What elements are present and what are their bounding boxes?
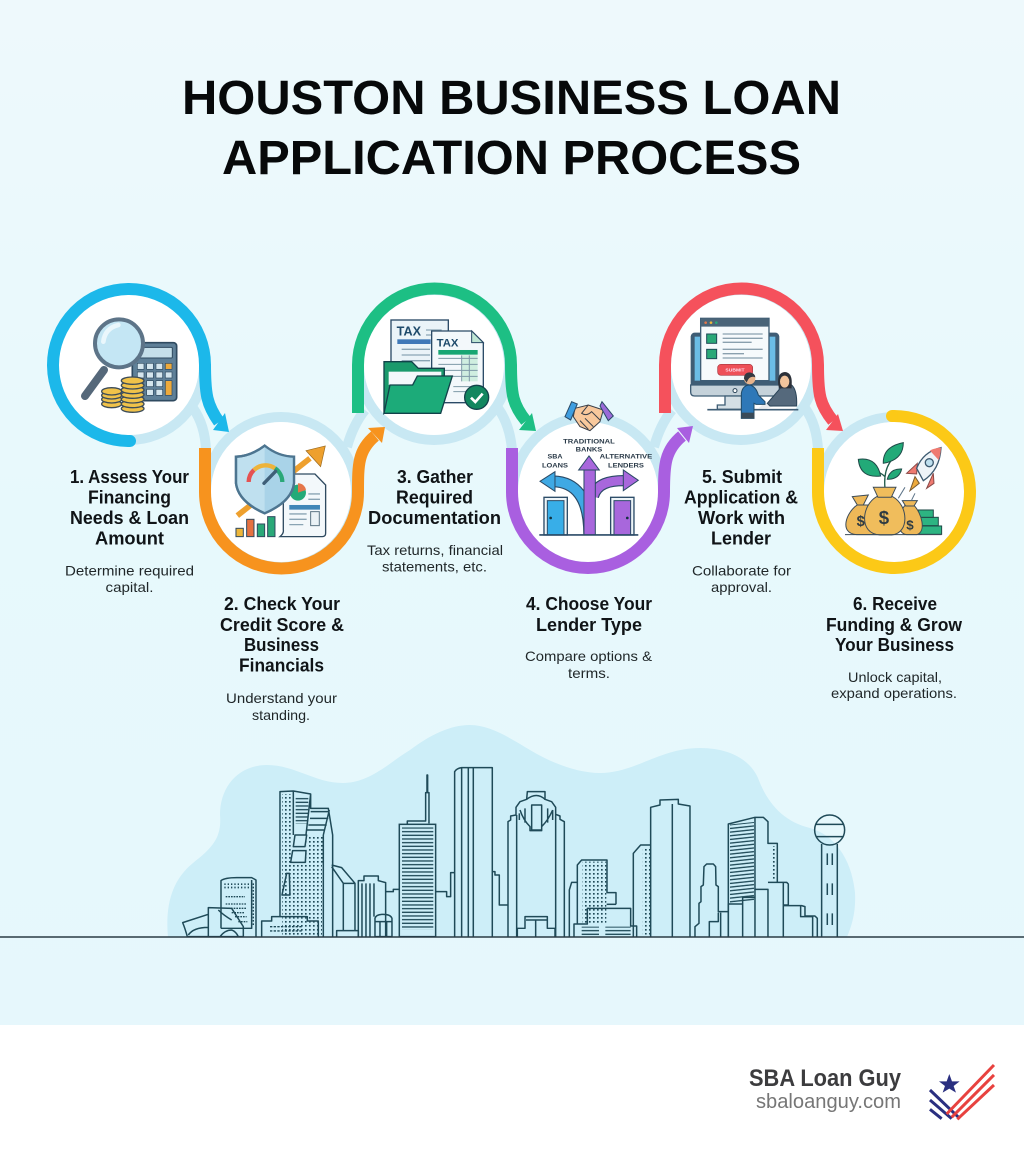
- description: step 4: Compare options &: [525, 648, 653, 664]
- title: HOUSTON BUSINESS LOAN: [182, 72, 841, 125]
- description: step 6: Unlock capital,: [848, 669, 942, 685]
- icon: handshake and diverging arrows: SBA: [547, 454, 563, 461]
- icon: money bags, plant and rocket: $: [906, 517, 914, 532]
- icon: tax documents and folder: [384, 320, 489, 413]
- title: [182, 72, 841, 185]
- description: step 4: [525, 648, 653, 681]
- heading: step 1: Financing: [88, 488, 171, 508]
- heading: step 2: Credit Score &: [220, 615, 344, 635]
- Houston skyline: left section: [183, 768, 508, 937]
- heading: step 4: 4. Choose Your: [526, 594, 652, 614]
- heading: step 2: 2. Check Your: [224, 594, 340, 614]
- description: step 1: capital.: [106, 579, 154, 595]
- icon: handshake and diverging arrows: ALTERNATIVE: [600, 454, 653, 461]
- description: step 3: [367, 542, 503, 574]
- title: APPLICATION PROCESS: [222, 132, 801, 185]
- step 4: choose lender type: [512, 402, 693, 681]
- icon: handshake and diverging arrows: BANKS: [576, 446, 603, 453]
- heading: step 2: Business: [244, 635, 319, 655]
- step 5: submit application: [665, 288, 843, 595]
- orange ring arrow: [205, 427, 385, 568]
- blue ring arrow: [53, 289, 229, 441]
- heading: step 1: [70, 467, 189, 548]
- heading: step 2: [220, 594, 344, 676]
- description: step 2: [226, 690, 337, 723]
- icon: magnifier, calculator and coins: [85, 319, 177, 412]
- step 1: assess financing needs: [53, 289, 229, 595]
- heading: step 1: Needs & Loan: [70, 508, 189, 528]
- description: step 5: approval.: [711, 579, 772, 595]
- heading: step 2: Financials: [239, 656, 324, 676]
- step 3: gather documentation: [358, 288, 536, 574]
- heading: step 4: [526, 594, 652, 635]
- description: step 5: [692, 562, 791, 595]
- heading: step 6: 6. Receive: [853, 594, 937, 614]
- heading: step 5: 5. Submit: [702, 467, 782, 487]
- footer brand text: [749, 1065, 902, 1113]
- icon: handshake and diverging arrows: LENDERS: [608, 462, 645, 469]
- description: step 3: statements, etc.: [382, 558, 487, 574]
- icon: money bags, plant and rocket: [845, 443, 942, 535]
- icon: computer form and handshake: [691, 318, 798, 418]
- footer brand text: SBA Loan Guy: [749, 1065, 902, 1092]
- yellow ring: [818, 416, 970, 568]
- ground line: [0, 936, 1024, 938]
- heading: step 3: [368, 467, 501, 528]
- icon: handshake and diverging arrows: TRADITIONAL: [563, 438, 615, 445]
- heading: step 3: Documentation: [368, 508, 501, 528]
- heading: step 5: Application &: [684, 488, 798, 508]
- heading: step 1: 1. Assess Your: [70, 467, 189, 487]
- step 2: check credit score: [205, 427, 385, 723]
- heading: step 4: Lender Type: [536, 615, 642, 635]
- heading: step 6: Your Business: [835, 635, 954, 655]
- description: step 5: Collaborate for: [692, 562, 791, 578]
- description: step 1: [65, 562, 194, 595]
- skyline backdrop blob: [167, 725, 855, 937]
- heading: step 5: [684, 467, 798, 548]
- green ring arrow: [358, 288, 536, 431]
- description: step 6: [831, 669, 957, 701]
- description: step 4: terms.: [568, 665, 610, 681]
- purple ring arrow: [512, 426, 693, 568]
- footer band: [0, 1025, 1024, 1154]
- icon: money bags, plant and rocket: $: [857, 514, 865, 530]
- heading: step 3: Required: [396, 488, 473, 508]
- description: step 6: expand operations.: [831, 685, 957, 701]
- icon: tax documents and folder: TAX: [397, 324, 422, 338]
- red ring arrow: [665, 288, 843, 431]
- icon: handshake and diverging arrows: LOANS: [542, 462, 569, 469]
- description: step 3: Tax returns, financial: [367, 542, 503, 558]
- heading: step 6: [826, 594, 963, 655]
- icon: handshake and diverging arrows: [539, 402, 653, 535]
- logo: star and stripes check: [930, 1065, 994, 1119]
- description: step 2: standing.: [252, 707, 310, 723]
- heading: step 5: Work with: [698, 508, 785, 528]
- icon: computer form and handshake: SUBMIT: [725, 368, 745, 374]
- icon: shield gauge, chart and report: [236, 446, 326, 537]
- heading: step 1: Amount: [95, 528, 164, 548]
- footer brand text: sbaloanguy.com: [756, 1091, 901, 1113]
- yellow ring rounded start: [886, 410, 898, 422]
- icon: tax documents and folder: TAX: [437, 338, 459, 350]
- step 6: receive funding: [818, 410, 970, 701]
- Houston skyline: right section: [508, 792, 845, 937]
- description: step 2: Understand your: [226, 690, 337, 706]
- heading: step 6: Funding & Grow: [826, 615, 963, 635]
- pale connector rings: [54, 290, 969, 567]
- heading: step 5: Lender: [711, 528, 771, 548]
- heading: step 3: 3. Gather: [397, 467, 473, 487]
- description: step 1: Determine required: [65, 562, 194, 578]
- icon: money bags, plant and rocket: $: [879, 507, 890, 528]
